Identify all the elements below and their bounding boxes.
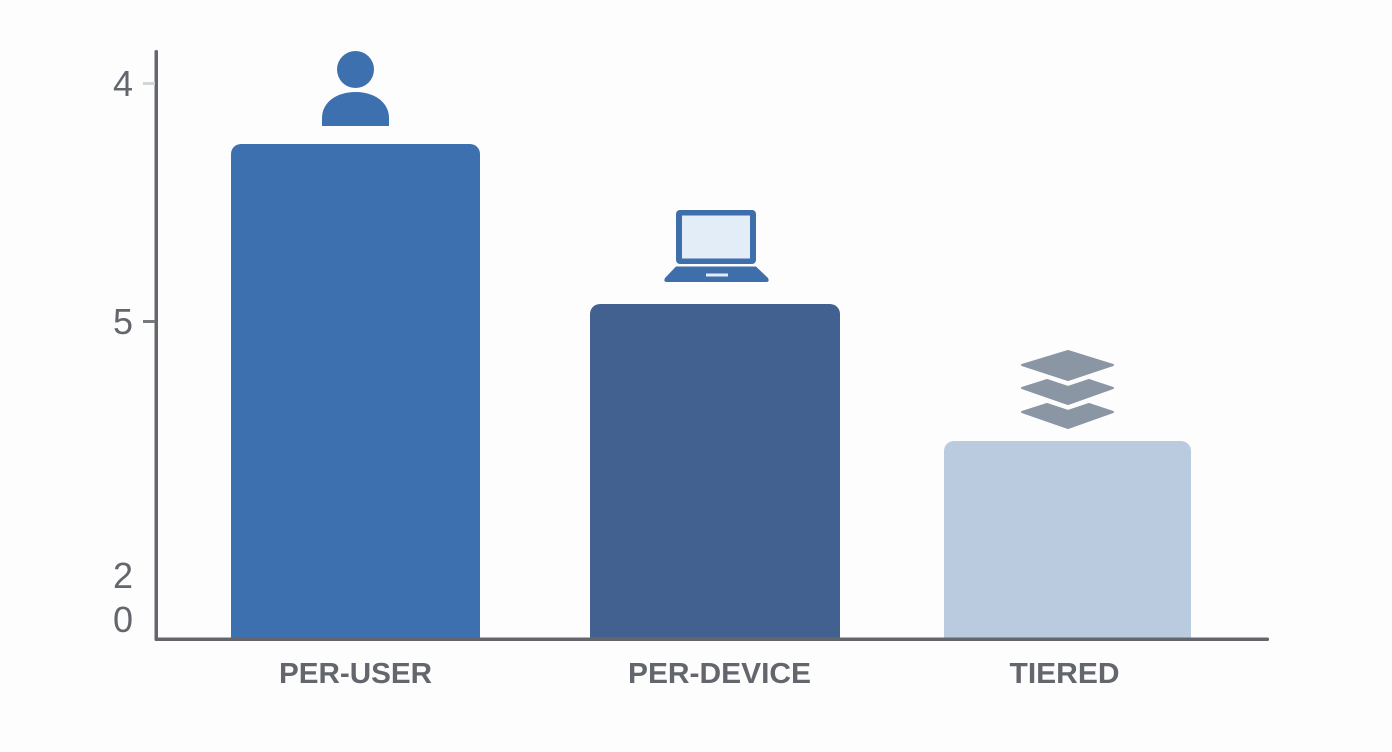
y axis: [154, 50, 158, 641]
icon: laptop: [664, 210, 769, 282]
bar: per-device: [590, 304, 840, 638]
bar: tiered: [944, 441, 1191, 638]
x label: per-user: PER-USER: [279, 658, 432, 690]
y tick: 5: [143, 320, 155, 323]
x label: tiered: TIERED: [1010, 658, 1120, 690]
icon: layers: [1022, 351, 1113, 428]
y label: 2: 2: [113, 555, 133, 596]
x label: per-device: PER-DEVICE: [628, 658, 811, 690]
x axis: [155, 638, 1269, 641]
bar: per-user: [231, 144, 480, 638]
y label: 4: 4: [113, 63, 133, 104]
y tick: 4: [143, 82, 155, 85]
y label: 0: 0: [113, 599, 133, 640]
icon: user: [322, 51, 389, 126]
y label: 5: 5: [113, 301, 133, 342]
